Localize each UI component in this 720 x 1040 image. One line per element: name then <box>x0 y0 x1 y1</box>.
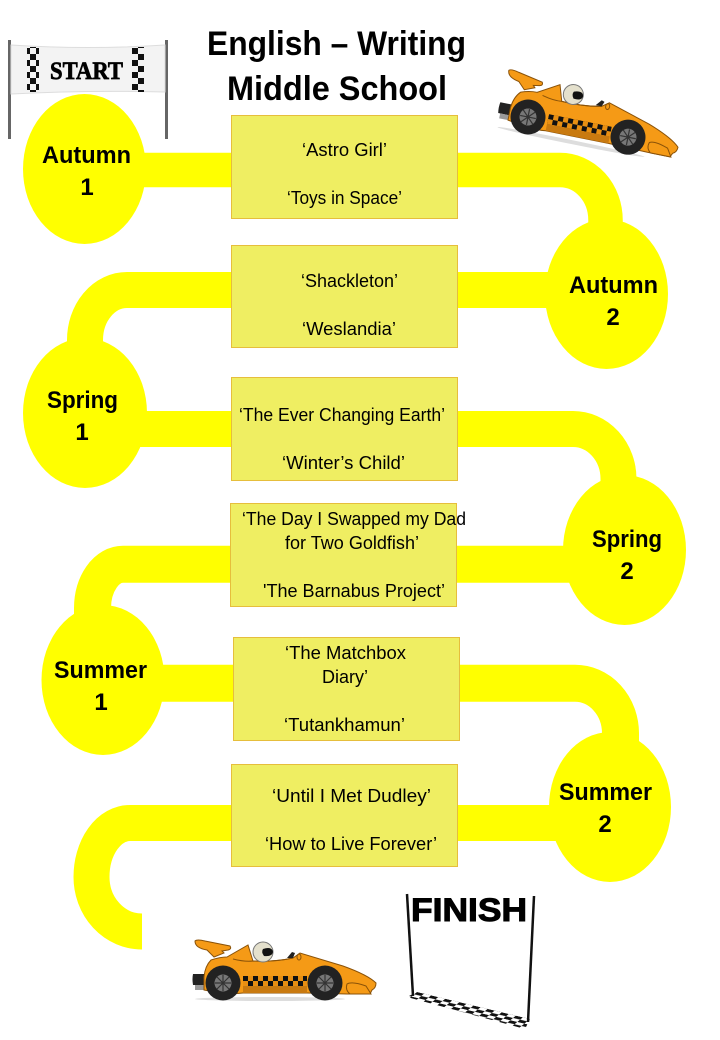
milestone: Spring 2: Spring <box>592 526 662 553</box>
milestone: Autumn 1 <box>23 94 146 244</box>
milestone: Spring 1: 1 <box>75 419 89 446</box>
panel: Spring 2 books: 'The Barnabus Project’ <box>263 581 445 601</box>
milestone: Spring 2: 2 <box>620 558 634 585</box>
milestone: Autumn 2: 2 <box>606 304 620 331</box>
track: Autumn 1 to Autumn 2 <box>140 170 606 235</box>
milestone: Autumn 2 <box>545 219 668 369</box>
panel: Autumn 2 books: ‘Weslandia’ <box>302 319 396 339</box>
panel: Summer 1 books: Diary’ <box>322 667 368 687</box>
panel: Spring 1 books <box>232 378 458 480</box>
panel: Spring 2 books: ‘The Day I Swapped my Dad <box>242 509 466 529</box>
panel: Autumn 2 books: ‘Shackleton’ <box>301 271 398 291</box>
panel: Summer 1 books: ‘The Matchbox <box>285 643 406 663</box>
panel: Summer 2 books <box>232 764 458 866</box>
panel: Summer 2 books: ‘How to Live Forever’ <box>265 834 437 854</box>
milestone: Summer 2: 2 <box>598 811 612 838</box>
icon: racing car bottom <box>192 940 376 1001</box>
icon: finish line: FINISH <box>411 892 527 928</box>
track: Spring 1 to Spring 2 <box>140 429 618 490</box>
panel: Autumn 2 books <box>232 246 458 348</box>
panel: Autumn 1 books <box>232 116 458 218</box>
title <box>207 25 466 108</box>
milestone: Summer 1 <box>42 605 164 755</box>
milestone: Autumn 1: 1 <box>80 174 94 201</box>
track: Summer 2 to finish <box>92 823 560 932</box>
icon: racing car top <box>495 69 686 165</box>
title: Middle School <box>227 70 447 108</box>
panel: Autumn 1 books: ‘Toys in Space’ <box>287 188 402 208</box>
panel: Autumn 1 books: ‘Astro Girl’ <box>302 140 387 160</box>
panel: Spring 1 books: ‘The Ever Changing Earth’ <box>239 405 445 425</box>
panel: Summer 2 books: ‘Until I Met Dudley’ <box>272 786 431 806</box>
panel: Spring 2 books: for Two Goldfish’ <box>285 533 419 553</box>
panel: Spring 1 books: ‘Winter’s Child’ <box>282 453 405 473</box>
milestone: Autumn 1: Autumn <box>42 142 131 169</box>
milestone: Summer 2 <box>549 732 671 882</box>
panel: Summer 1 books: ‘Tutankhamun’ <box>284 715 405 735</box>
milestone: Summer 1: 1 <box>94 689 108 716</box>
milestone: Spring 1 <box>23 338 147 488</box>
track: Spring 2 to Summer 1 <box>92 564 575 620</box>
icon: start banner: START <box>50 58 123 85</box>
panel: Summer 1 books <box>234 638 460 740</box>
title: English – Writing <box>207 25 466 63</box>
icon: start banner <box>8 40 168 139</box>
panel: Spring 2 books <box>230 504 466 606</box>
milestone: Summer 2: Summer <box>559 779 652 806</box>
track: Autumn 2 to Spring 1 <box>85 290 560 352</box>
icon: finish line <box>407 892 534 1029</box>
milestone: Spring 2 <box>563 475 686 625</box>
milestone: Summer 1: Summer <box>54 657 147 684</box>
track: Summer 1 to Summer 2 <box>160 683 620 746</box>
milestone: Spring 1: Spring <box>47 387 118 414</box>
milestone: Autumn 2: Autumn <box>569 272 658 299</box>
